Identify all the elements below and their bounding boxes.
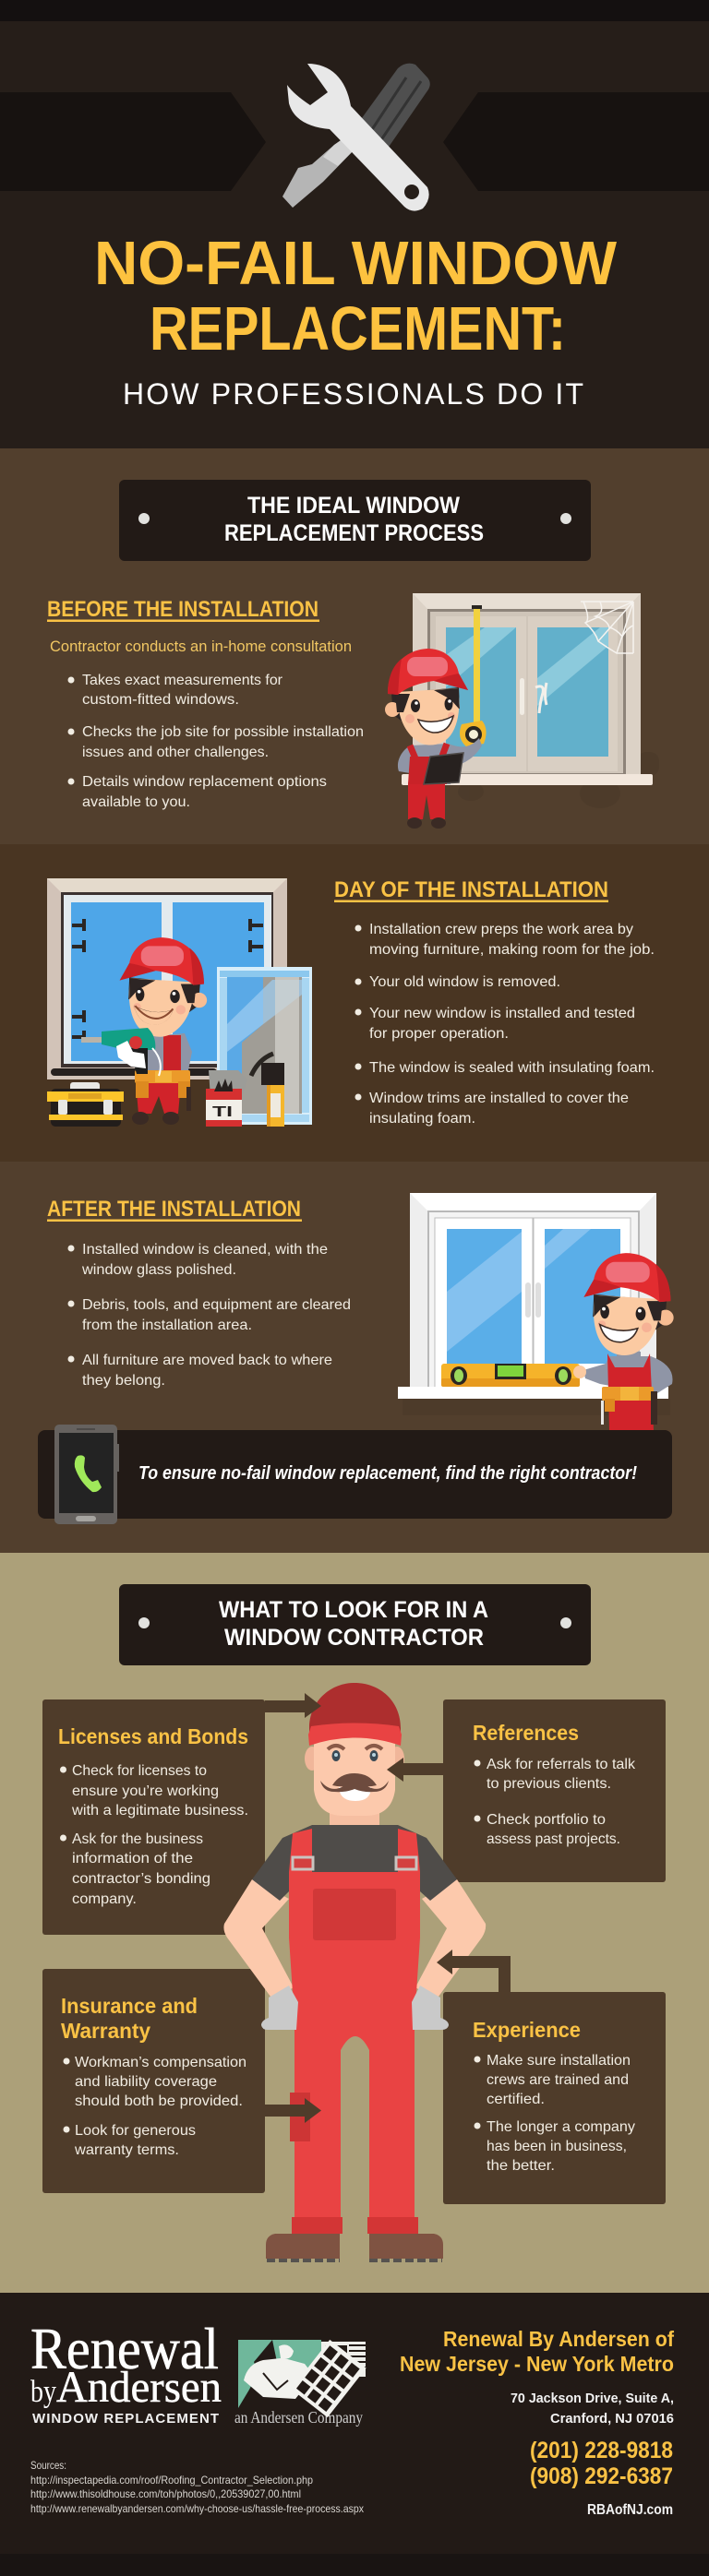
heading banner: what to look for in a window contractor: WINDOW CONTRACTOR (224, 1625, 484, 1651)
bullet list: after the installation: Debris, tools, and equipment are cleared (82, 1297, 351, 1313)
panel: insurance and warranty: Insurance and (61, 1994, 198, 2018)
illustration: fastener box and foam can: TI (212, 1104, 233, 1120)
arrow: to cap (265, 1693, 321, 1718)
smile (339, 1787, 371, 1801)
icon: smartphone (54, 1425, 119, 1524)
overalls (289, 1829, 420, 2217)
logo graphic: installer carrying window (238, 2340, 367, 2417)
eyes and brows (328, 1746, 382, 1761)
heading: before the installation: BEFORE THE INSTALLATION (47, 597, 318, 622)
trouser cuffs (292, 2217, 418, 2234)
bullet list: day of the installation: The window is sealed with insulating foam. (369, 1060, 655, 1076)
illustration: fastener box and foam can (206, 1054, 284, 1127)
heading banner: the ideal window replacement process: REPLACEMENT PROCESS (224, 520, 484, 546)
heading banner: what to look for in a window contractor (119, 1584, 591, 1665)
gloves (261, 1986, 449, 2030)
panel: experience: the better. (487, 2158, 555, 2174)
text: company contact details: 70 Jackson Drive, Suite A, (511, 2391, 674, 2406)
panel: experience: certified. (487, 2092, 545, 2107)
text: company contact details: Cranford, NJ 07016 (550, 2411, 674, 2427)
callout: find the right contractor: To ensure no-fail window replacement, find the right contractor! (138, 1463, 637, 1484)
logo: Renewal by Andersen: Renewal (30, 2316, 219, 2381)
bullet list: before the installation: Takes exact measurements for (82, 673, 283, 688)
bullet list: day of the installation: moving furniture, making room for the job. (369, 942, 655, 958)
arrow: to face (387, 1758, 443, 1782)
bullet list: after the installation: Installed window is cleaned, with the (82, 1242, 328, 1258)
bullet list: after the installation: they belong. (82, 1373, 165, 1389)
panel: experience (443, 1992, 666, 2204)
panel: insurance and warranty (42, 1969, 265, 2193)
panel: licenses and bonds: company. (72, 1891, 137, 1907)
arrow: to arm (437, 1950, 511, 1992)
neck (330, 1808, 379, 1829)
panel: insurance and warranty: and liability coverage (75, 2074, 217, 2090)
panel: experience: Make sure installation (487, 2053, 631, 2069)
panel: licenses and bonds: contractor’s bonding (72, 1871, 210, 1887)
illustration: window opening (47, 878, 287, 1079)
illustration: toolbox (47, 1082, 124, 1127)
logo: Renewal by Andersen: by (30, 2375, 56, 2409)
icon: crossed wrench and screwdriver (282, 64, 430, 211)
strap buckles (293, 1857, 416, 1869)
text: sources (30, 2459, 364, 2515)
subtitle: HOW PROFESSIONALS DO IT (123, 377, 583, 411)
bullet list: before the installation: custom-fitted windows. (82, 692, 239, 708)
panel: references: References (473, 1721, 579, 1745)
heading: after the installation: AFTER THE INSTALLATION (47, 1197, 301, 1222)
bullet list: day of the installation: Your new window is installed and tested (369, 1006, 635, 1021)
panel: references (443, 1699, 666, 1882)
title: NO-FAIL WINDOW (94, 229, 618, 298)
leg pocket (290, 2093, 310, 2141)
text: consultation lead: Contractor conducts an in-home consultation (50, 638, 352, 655)
panel: references: to previous clients. (487, 1776, 611, 1792)
cap band (308, 1723, 402, 1746)
logo: Renewal by Andersen: Andersen (56, 2363, 222, 2412)
panel: experience: crews are trained and (487, 2072, 629, 2088)
boots (266, 2234, 443, 2259)
panel: licenses and bonds: Check for licenses to (72, 1763, 207, 1779)
text: company contact details: RBAofNJ.com (587, 2502, 673, 2518)
panel: insurance and warranty: Workman’s compensation (75, 2055, 246, 2070)
panel: references: Ask for referrals to talk (487, 1757, 636, 1772)
logo: Renewal by Andersen: an Andersen Company (234, 2408, 363, 2427)
bullet list: before the installation: issues and other challenges. (82, 745, 269, 760)
heading banner: what to look for in a window contractor: WHAT TO LOOK FOR IN A (219, 1597, 488, 1623)
text: sources: Sources: (30, 2459, 66, 2472)
panel: licenses and bonds: Ask for the business (72, 1831, 203, 1847)
text: sources: http://www.renewalbyandersen.com/why-choose-us/hassle-free-process.aspx (30, 2502, 364, 2515)
panel: licenses and bonds: with a legitimate business. (71, 1803, 248, 1819)
panel: experience: Experience (473, 2018, 581, 2042)
text: company contact details (400, 2327, 674, 2518)
callout: find the right contractor (38, 1425, 672, 1524)
panel: references: assess past projects. (487, 1831, 620, 1847)
cap (309, 1683, 401, 1737)
bullet list: before the installation: Checks the job site for possible installation (82, 724, 364, 740)
bullet list: after the installation: from the installation area. (82, 1318, 252, 1333)
illustration: contractor with tablet (385, 649, 482, 829)
title: REPLACEMENT: (150, 294, 566, 364)
header ribbons (0, 92, 709, 191)
bullet list: day of the installation: for proper operation. (369, 1026, 509, 1042)
illustration: new window frame (217, 967, 312, 1125)
drill (81, 1028, 161, 1076)
boot soles (267, 2259, 442, 2262)
level tool (441, 1364, 580, 1387)
arms (223, 1879, 486, 2000)
panel: licenses and bonds: Licenses and Bonds (58, 1724, 248, 1748)
bullet list: day of the installation: insulating foam. (369, 1111, 475, 1127)
logo: Renewal by Andersen: WINDOW REPLACEMENT (32, 2411, 219, 2427)
panel: experience: The longer a company (487, 2119, 635, 2135)
bullet list: day of the installation: Window trims are installed to cover the (369, 1091, 629, 1106)
panel: licenses and bonds: information of the (72, 1851, 193, 1866)
bullet list: before the installation: Details window replacement options (82, 774, 327, 790)
illustration: contractor with drill (81, 937, 207, 1125)
heading banner: the ideal window replacement process (119, 480, 591, 561)
logo: Renewal by Andersen (30, 2316, 367, 2427)
measuring tape (460, 605, 487, 747)
panel: insurance and warranty: Look for generous (75, 2123, 196, 2139)
illustration: old window with cobweb (402, 593, 659, 808)
bullet list: before the installation (68, 673, 364, 810)
arrow: to pocket (265, 2098, 321, 2123)
panel: insurance and warranty: Warranty (61, 2019, 150, 2043)
moustache (320, 1773, 389, 1792)
bullet list: before the installation: available to you. (82, 794, 190, 810)
illustration: contractor with level (573, 1253, 674, 1430)
panel: insurance and warranty: should both be provided. (75, 2093, 243, 2109)
ears (305, 1747, 404, 1771)
bullet list: day of the installation: Installation crew preps the work area by (369, 922, 633, 937)
panel: licenses and bonds: ensure you’re working (72, 1783, 219, 1799)
panel: licenses and bonds (42, 1699, 265, 1935)
title (94, 229, 618, 364)
bullet list: day of the installation (354, 922, 655, 1127)
panel: insurance and warranty: warranty terms. (74, 2142, 179, 2158)
face (314, 1735, 395, 1816)
text: company contact details: (201) 228-9818 (530, 2438, 673, 2463)
bullet list: after the installation (68, 1242, 351, 1389)
illustration: finished window with level (398, 1193, 670, 1415)
bullet list: day of the installation: Your old window is removed. (369, 974, 560, 990)
text: sources: http://www.thisoldhouse.com/toh/photos/0,,20539027,00.html (30, 2487, 301, 2500)
text: company contact details: New Jersey - New York Metro (400, 2352, 674, 2376)
heading: day of the installation: DAY OF THE INSTALLATION (334, 877, 608, 902)
heading banner: the ideal window replacement process: THE IDEAL WINDOW (247, 493, 460, 519)
text: company contact details: Renewal By Andersen of (443, 2327, 674, 2351)
shirt (252, 1825, 457, 1910)
bullet list: after the installation: window glass polished. (81, 1262, 236, 1278)
bullet list: after the installation: All furniture are moved back to where (82, 1353, 332, 1368)
text: sources: http://inspectapedia.com/roof/Roofing_Contractor_Selection.php (30, 2474, 313, 2487)
text: company contact details: (908) 292-6387 (530, 2463, 673, 2489)
panel: experience: has been in business, (487, 2139, 627, 2154)
panel: references: Check portfolio to (487, 1812, 606, 1828)
illustration: contractor figure (223, 1683, 486, 2260)
